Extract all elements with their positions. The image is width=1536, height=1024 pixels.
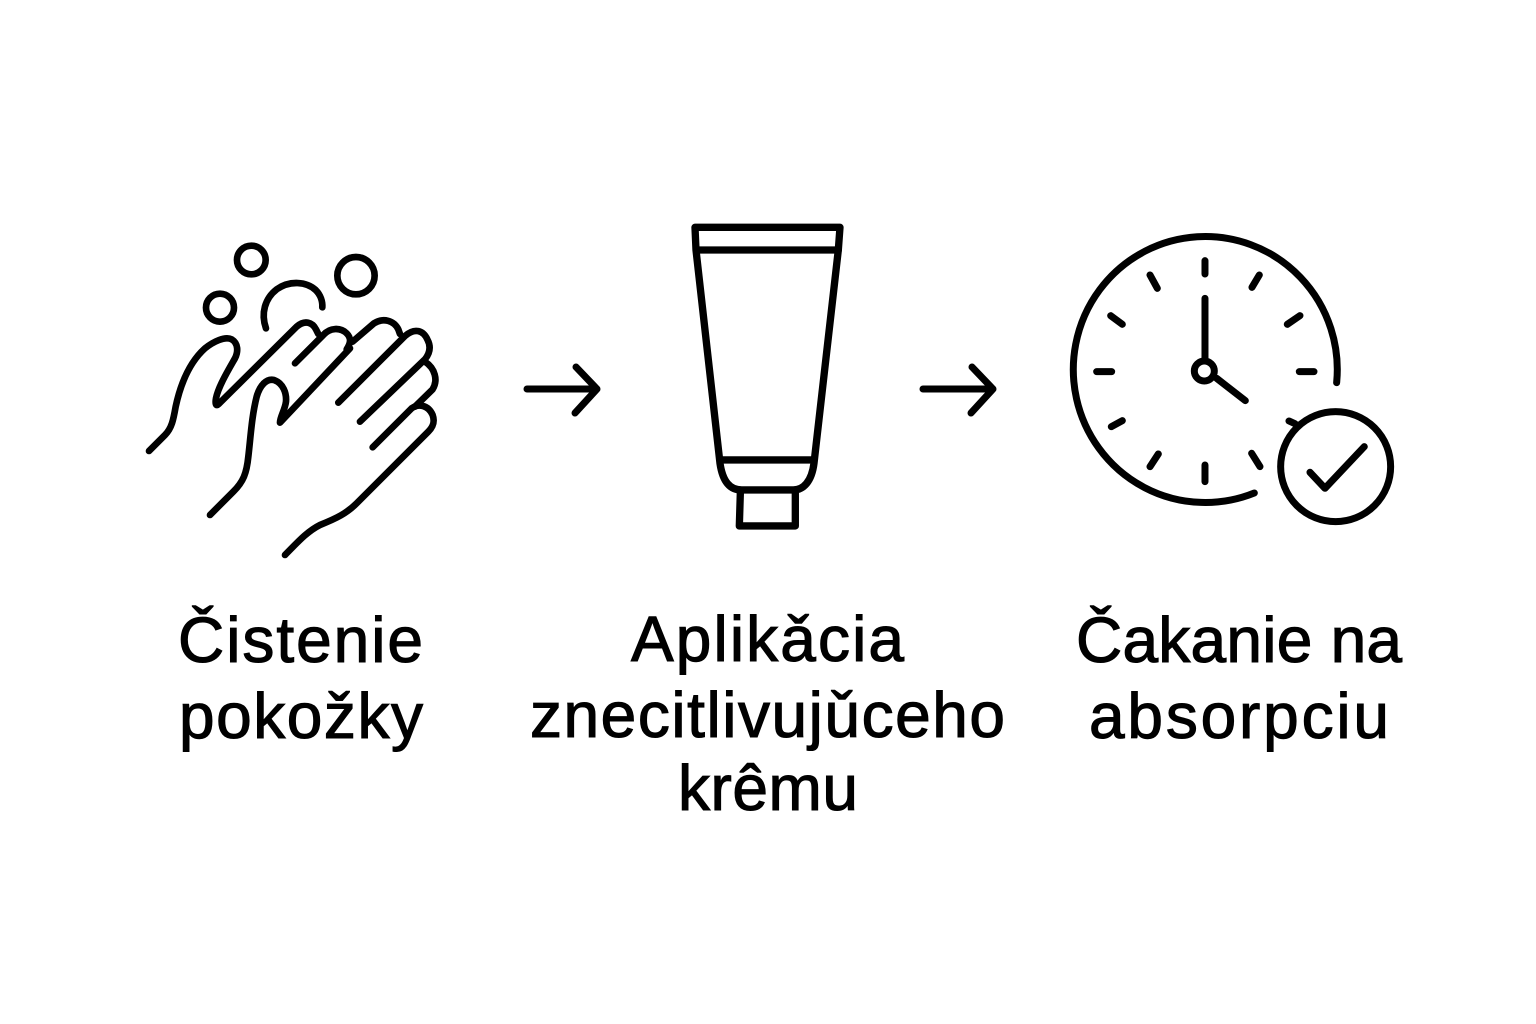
arrow: hands to tube [527,367,597,413]
back hand [149,323,318,451]
label: step 1 [178,604,423,752]
label: step 3: absorpciu [1089,680,1389,752]
soap bubbles [206,246,375,328]
icon: clock with check mark [1073,237,1391,522]
arrow: tube to clock [923,367,993,413]
label: step 2: krêmu [678,752,858,824]
clock ticks [1097,261,1314,482]
tube body [695,227,840,490]
icon: cream tube [695,227,840,526]
check badge [1281,412,1391,522]
label: step 2 [530,603,1005,824]
label: step 3: Čakanie na [1076,604,1402,676]
label: step 1: Čistenie [178,604,423,676]
icon: washing hands with soap bubbles [149,246,435,555]
label: step 2: znecitlivujǔceho [530,679,1005,751]
tube bands [697,250,838,460]
tube cap [739,493,795,526]
front hand [210,348,350,515]
label: step 3 [1076,604,1402,752]
label: step 1: pokožky [179,680,423,752]
clock hands [1205,298,1245,401]
label: step 2: Aplikǎcia [631,603,904,675]
clock rim [1073,237,1337,502]
